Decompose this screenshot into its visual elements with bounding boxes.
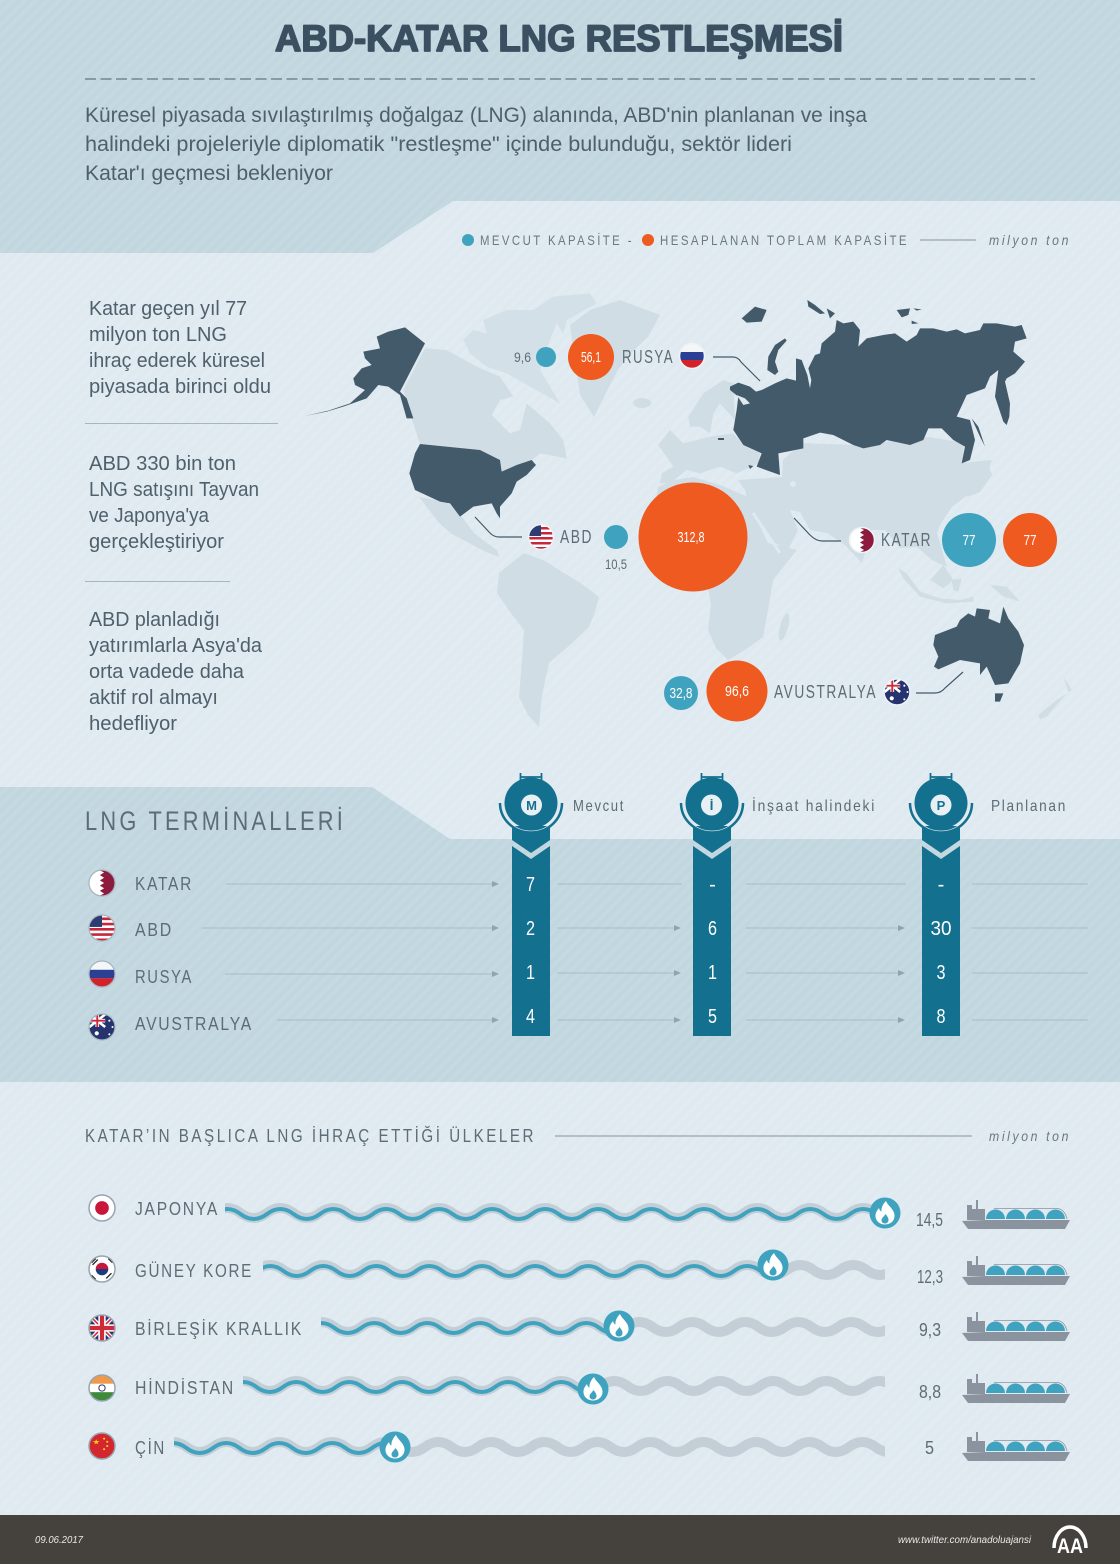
callout: Avustralya: 32,8 — [670, 685, 692, 702]
row: Japonya: 14,5 — [916, 1210, 943, 1230]
column: Planlanan: 8 — [936, 1006, 946, 1028]
callout: ABD: ABD — [560, 527, 593, 547]
side notes: orta vadede daha — [89, 661, 245, 683]
title: ABD-KATAR LNG RESTLEŞMESİ — [275, 18, 843, 59]
icon: AA logo — [1054, 1527, 1086, 1558]
column: Mevcut: 7 — [526, 874, 535, 896]
side notes: ABD 330 bin ton — [89, 453, 236, 475]
heading: export countries — [85, 1125, 1071, 1146]
intro text — [85, 104, 867, 185]
callout: Katar: KATAR — [881, 530, 932, 550]
row: Çin — [89, 1432, 1070, 1462]
row: Japonya: JAPONYA — [135, 1199, 219, 1219]
footer — [0, 1515, 1120, 1564]
legend: milyon ton — [989, 232, 1071, 248]
column: Planlanan: P — [937, 798, 946, 813]
column: Planlanan: Planlanan — [991, 798, 1067, 815]
side notes — [85, 298, 278, 735]
callout: Rusya — [514, 334, 760, 381]
row: Japonya — [89, 1195, 1070, 1230]
terminal flow lines — [202, 884, 1088, 1020]
intro text: Katar'ı geçmesi bekleniyor — [85, 162, 333, 185]
panel: terminals band — [0, 787, 1120, 1082]
column: Planlanan — [910, 773, 1067, 1036]
heading: LNG terminalleri: LNG TERMİNALLERİ — [85, 805, 346, 836]
column: Mevcut: 4 — [526, 1006, 535, 1028]
row: Birleşik Krallık: BİRLEŞİK KRALLIK — [135, 1319, 303, 1339]
column: İnşaat halindeki: 5 — [708, 1006, 717, 1028]
side notes: hedefliyor — [89, 713, 177, 735]
intro text: halindeki projeleriyle diplomatik "restleşme" içinde bulunduğu, sektör lideri — [85, 133, 792, 156]
column: Planlanan: - — [938, 874, 944, 896]
terminal row labels: ABD — [135, 920, 173, 940]
callout: Katar: 77 — [1024, 532, 1036, 549]
row: Güney Kore — [89, 1250, 1070, 1287]
heading: export countries: KATAR’IN BAŞLICA LNG İHRAÇ ETTİĞİ ÜLKELER — [85, 1125, 536, 1146]
heading: export countries: milyon ton — [989, 1128, 1071, 1144]
callout: Katar — [794, 513, 1057, 567]
side notes: aktif rol almayı — [89, 687, 218, 709]
callout: Rusya: RUSYA — [622, 347, 674, 367]
column: İnşaat halindeki: İnşaat halindeki — [752, 796, 876, 815]
column: Planlanan: 3 — [936, 962, 946, 984]
callout: ABD: 10,5 — [605, 556, 627, 572]
callout: Katar: 77 — [962, 532, 976, 549]
callout: Avustralya — [664, 660, 963, 722]
world map — [305, 293, 1072, 727]
row: Hindistan — [89, 1374, 1070, 1404]
callout: Rusya: 9,6 — [514, 349, 531, 365]
row: Çin: ÇİN — [135, 1438, 166, 1458]
column: Mevcut: Mevcut — [573, 798, 625, 815]
icon: AA logo: AA — [1057, 1535, 1083, 1558]
side notes: Katar geçen yıl 77 — [89, 298, 247, 320]
row: Hindistan: 8,8 — [919, 1382, 941, 1402]
column: İnşaat halindeki: 6 — [708, 918, 717, 940]
side notes: gerçekleştiriyor — [89, 531, 224, 553]
terminal row labels: KATAR — [135, 874, 193, 894]
terminal row labels: RUSYA — [135, 967, 193, 987]
row: Birleşik Krallık — [89, 1310, 1070, 1342]
side notes: yatırımlarla Asya'da — [89, 635, 263, 657]
column: İnşaat halindeki: İ — [710, 798, 713, 813]
side notes: milyon ton LNG — [89, 324, 227, 346]
column: İnşaat halindeki — [681, 773, 876, 1036]
side notes: piyasada birinci oldu — [89, 376, 271, 398]
side notes: ABD planladığı — [89, 609, 220, 631]
side notes: LNG satışını Tayvan — [89, 479, 259, 501]
arrow heads — [492, 881, 905, 1023]
column: Mevcut: 2 — [526, 918, 535, 940]
footer: 09.06.2017 — [35, 1535, 83, 1546]
callout: ABD — [475, 482, 748, 592]
terminal row labels — [89, 870, 253, 1040]
intro text: Küresel piyasada sıvılaştırılmış doğalgaz (LNG) alanında, ABD'nin planlanan ve inşa — [85, 104, 867, 127]
legend: HESAPLANAN TOPLAM KAPASİTE — [660, 231, 909, 248]
column: Mevcut: 1 — [526, 962, 535, 984]
callout: Rusya: 56,1 — [581, 349, 601, 366]
side notes: ve Japonya'ya — [89, 505, 210, 527]
column: Mevcut — [500, 773, 625, 1036]
callout: Avustralya: 96,6 — [725, 683, 749, 700]
row: Güney Kore: GÜNEY KORE — [135, 1261, 253, 1281]
row: Birleşik Krallık: 9,3 — [919, 1320, 941, 1340]
row: Çin: 5 — [925, 1438, 934, 1458]
column: İnşaat halindeki: - — [709, 874, 716, 896]
row: Güney Kore: 12,3 — [917, 1267, 943, 1287]
row: Hindistan: HİNDİSTAN — [135, 1378, 235, 1398]
footer: www.twitter.com/anadoluajansi — [898, 1535, 1032, 1546]
callout: Avustralya: AVUSTRALYA — [774, 682, 877, 702]
callout: ABD: 312,8 — [678, 529, 704, 546]
column: Mevcut: M — [526, 798, 537, 813]
column: İnşaat halindeki: 1 — [708, 962, 717, 984]
side notes: ihraç ederek küresel — [89, 350, 265, 372]
legend — [462, 231, 1071, 248]
terminal row labels: AVUSTRALYA — [135, 1014, 253, 1034]
column: Planlanan: 30 — [930, 918, 952, 940]
panel: header band — [0, 0, 1120, 253]
legend: MEVCUT KAPASİTE - — [480, 231, 634, 248]
